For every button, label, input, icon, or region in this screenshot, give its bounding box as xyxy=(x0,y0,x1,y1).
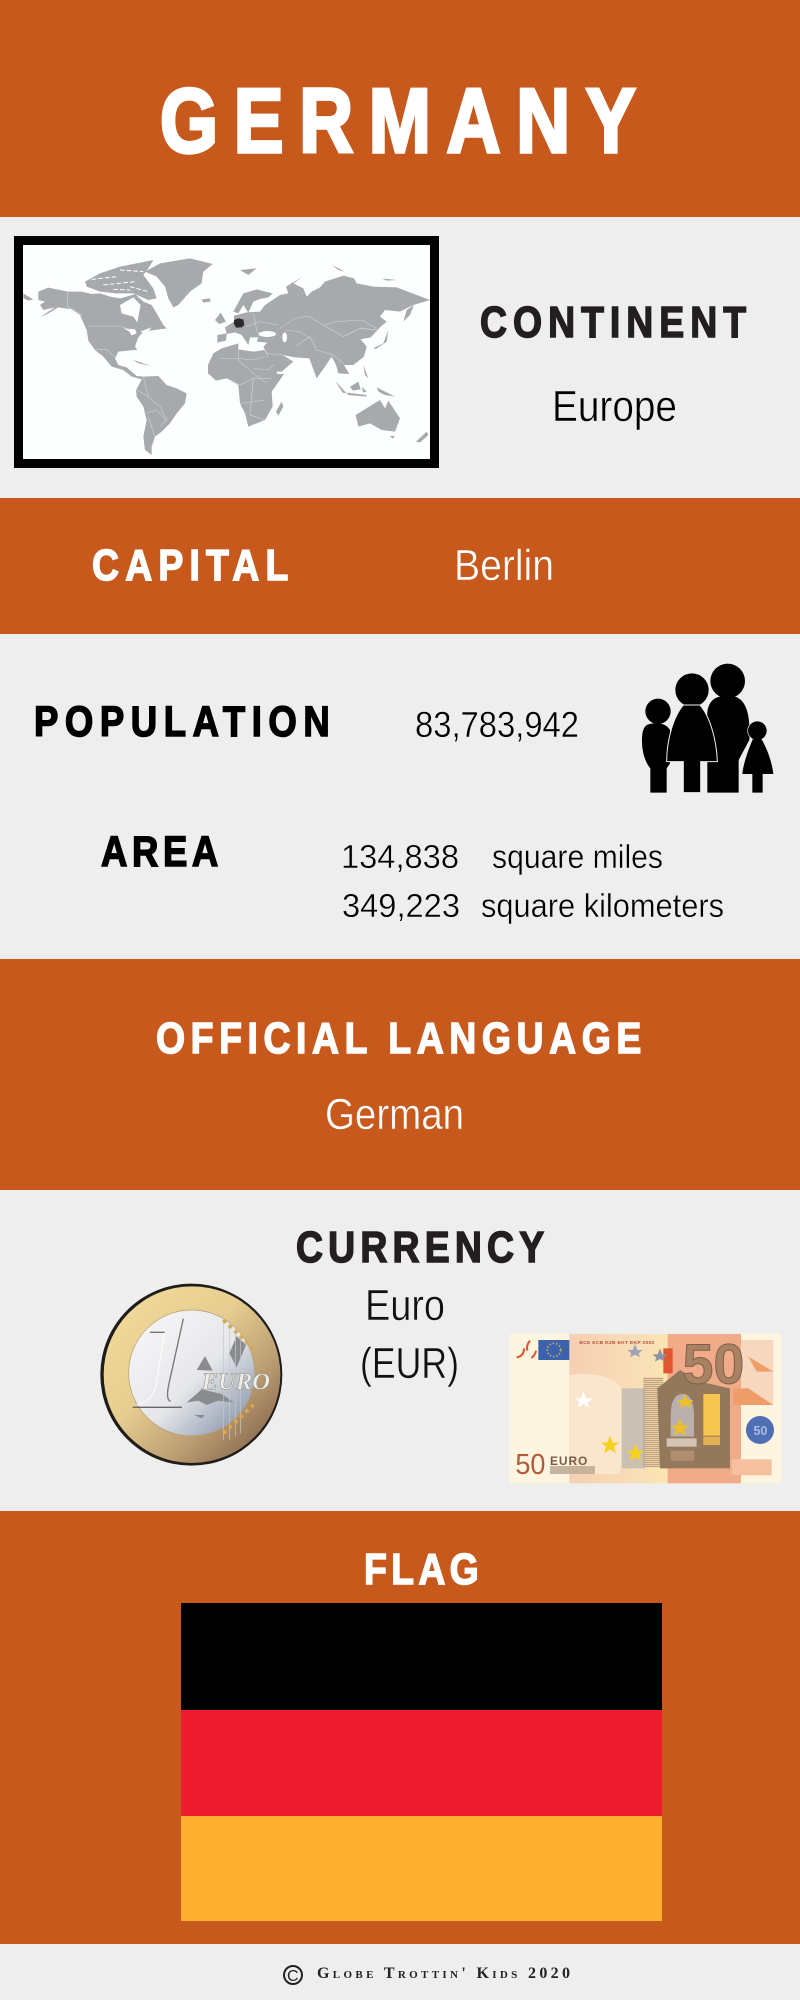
copyright mark: C xyxy=(287,1968,299,1985)
canadian arctic xyxy=(85,260,157,300)
icon: fifty euro banknote: BCE ECB EZB EKT EKP 2002 xyxy=(579,1340,655,1346)
flag heading: FLAG xyxy=(364,1544,479,1594)
continent heading: CONTINENT xyxy=(480,297,746,347)
icon: one euro coin xyxy=(100,1284,282,1466)
language heading: OFFICIAL LANGUAGE xyxy=(156,1013,641,1063)
north america xyxy=(38,288,167,379)
panel: official language xyxy=(0,959,800,1190)
panel: footer xyxy=(0,1944,800,2000)
panel: population and area xyxy=(0,634,800,959)
banknote label: EURO xyxy=(550,1454,587,1468)
population heading: POPULATION xyxy=(34,698,330,746)
uk xyxy=(215,313,226,324)
caspian sea xyxy=(282,332,287,342)
iberia xyxy=(217,333,227,343)
language value: German xyxy=(325,1090,464,1139)
continent value: Europe xyxy=(552,382,677,431)
icon: fifty euro banknote xyxy=(510,1333,781,1483)
tasmania and new zealand xyxy=(390,432,428,443)
area square kilometers: square kilometers xyxy=(481,887,724,924)
panel: title banner xyxy=(0,0,800,217)
panel: flag xyxy=(0,1511,800,1944)
eurasia xyxy=(225,276,430,378)
germany highlight xyxy=(234,318,244,328)
iceland xyxy=(202,298,211,303)
eurasia and africa borders xyxy=(220,313,378,420)
scandinavia xyxy=(233,289,273,313)
title: GERMANY xyxy=(160,70,636,172)
capital value: Berlin xyxy=(454,541,554,590)
cuba xyxy=(133,360,151,366)
icon: family xyxy=(642,664,773,793)
area square miles: 134,838 xyxy=(341,838,459,875)
currency name: Euro xyxy=(365,1281,445,1330)
south america xyxy=(136,376,187,455)
area square kilometers: 349,223 xyxy=(342,887,460,924)
copyright mark xyxy=(284,1966,302,1985)
currency heading: CURRENCY xyxy=(296,1222,544,1272)
panel: currency xyxy=(0,1190,800,1511)
area heading: AREA xyxy=(101,828,218,876)
coin label: EURO xyxy=(201,1368,270,1395)
currency code: (EUR) xyxy=(360,1339,459,1388)
population value: 83,783,942 xyxy=(415,704,579,745)
black sea xyxy=(259,331,276,337)
arctic islands xyxy=(240,265,397,281)
capital heading: CAPITAL xyxy=(92,540,288,590)
americas borders xyxy=(68,292,167,437)
world map with frame xyxy=(14,236,439,468)
madagascar xyxy=(276,402,283,416)
greenland xyxy=(145,258,213,307)
icon: fifty euro banknote: 50 xyxy=(683,1333,744,1396)
japan and far east xyxy=(373,305,414,349)
area square miles: square miles xyxy=(492,838,663,875)
area square kilometers xyxy=(342,887,724,924)
australia xyxy=(356,400,400,432)
footer credit: Globe Trottin' Kids 2020 xyxy=(317,1965,570,1982)
panel: continent xyxy=(14,236,746,468)
area square miles xyxy=(341,838,663,875)
banknote label: 50 xyxy=(515,1449,545,1481)
german flag xyxy=(181,1603,662,1921)
southeast asia islands xyxy=(335,365,395,397)
panel: capital xyxy=(0,498,800,634)
icon: fifty euro banknote: 50 xyxy=(753,1424,767,1438)
africa xyxy=(208,343,284,427)
alaska tip xyxy=(23,293,33,301)
banknote label xyxy=(515,1449,587,1481)
arch building xyxy=(657,1370,730,1468)
